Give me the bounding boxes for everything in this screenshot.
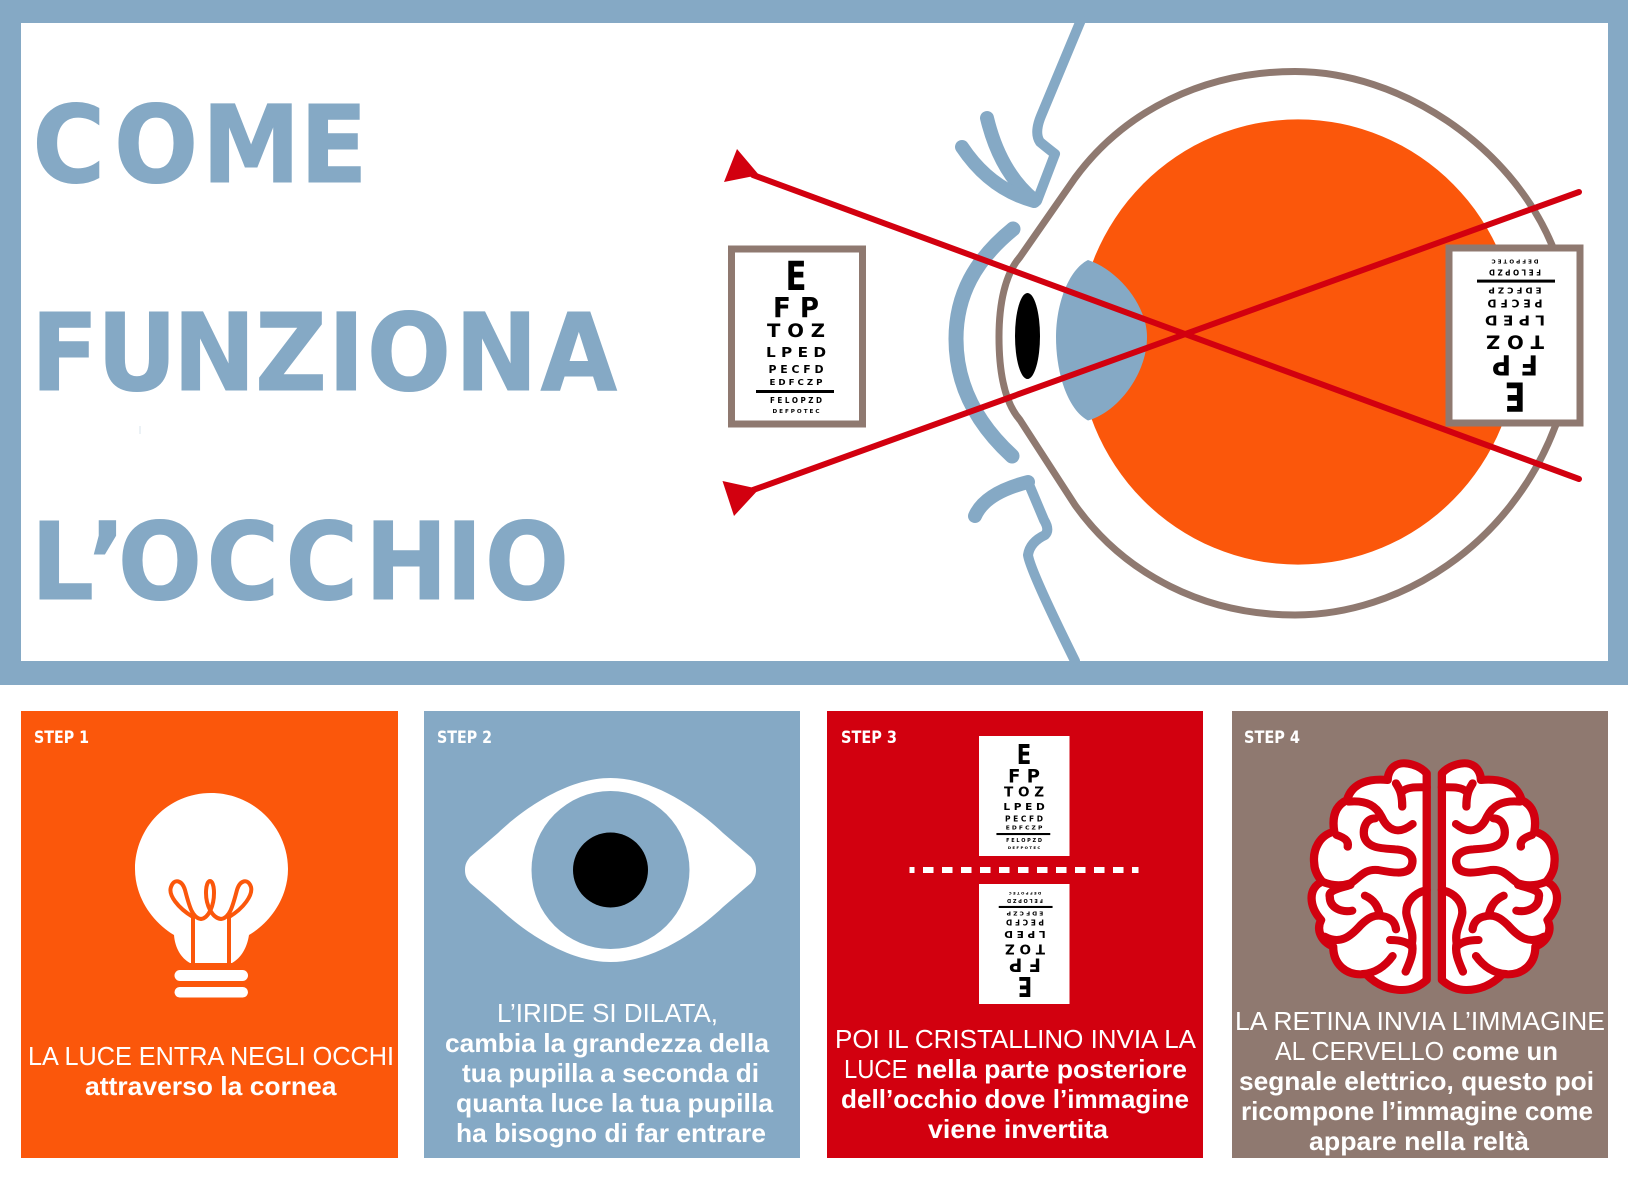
eye chart: left: E — [786, 254, 806, 300]
eye chart: inverted on retina: D E F P O T E C — [1492, 258, 1538, 264]
icon: inverted eye chart: F P — [1009, 953, 1041, 975]
frame: top panel border — [0, 0, 1628, 685]
step 3 label: STEP 3 — [841, 728, 897, 748]
step 4 text: LA RETINA INVIA L’IMMAGINE — [1235, 1006, 1605, 1036]
icon: brain — [1312, 763, 1557, 990]
step 1 text: attraverso la cornea — [85, 1071, 337, 1101]
eye diagram — [722, 20, 1580, 661]
icon: upright eye chart: E D F C Z P — [1006, 826, 1042, 832]
panel: step 2 — [424, 711, 800, 1158]
eye chart: inverted on retina: P E C F D — [1488, 297, 1542, 310]
panel: step 3 — [827, 711, 1203, 1158]
icon: upright eye chart: F E L O P Z D — [1006, 838, 1042, 844]
upper face profile and lashes — [962, 20, 1081, 201]
lower face profile — [975, 482, 1075, 661]
eyeball outline — [999, 72, 1570, 615]
title line: L'OCCHIO: L’OCCHIO — [31, 501, 569, 625]
step 2 text: cambia la grandezza della — [445, 1028, 770, 1058]
eye chart: left: F E L O P Z D — [770, 395, 822, 405]
icon: light bulb — [135, 793, 288, 998]
step 2 text: ha bisogno di far entrare — [456, 1118, 766, 1148]
eye chart: left: P E C F D — [768, 363, 824, 376]
icon: upright eye chart: E — [1017, 738, 1031, 771]
eyelid arc — [956, 229, 1013, 456]
eye chart: inverted on retina: E D F C Z P — [1488, 286, 1542, 296]
icon: upright eye chart: D E F P O T E C — [1008, 845, 1040, 850]
step 1 text: LA LUCE ENTRA NEGLI OCCHI — [28, 1041, 394, 1071]
eye chart: inverted on retina: E — [1504, 373, 1526, 419]
icon: inverted eye chart: F E L O P Z D — [1007, 897, 1043, 903]
step 4 text: segnale elettrico, questo poi — [1239, 1066, 1594, 1096]
eye chart: left — [732, 249, 862, 424]
pupil — [1015, 293, 1040, 379]
step 4 text: come un — [1452, 1036, 1558, 1066]
dashed mirror line — [910, 867, 1138, 873]
eye chart: inverted on retina — [1449, 248, 1580, 423]
step 2 text: tua pupilla a seconda di — [462, 1058, 759, 1088]
step 3 text — [835, 1024, 1197, 1144]
eye chart: inverted on retina: F P — [1492, 349, 1538, 380]
title line: COME: COME — [32, 84, 367, 208]
icon: upright eye chart — [979, 736, 1070, 856]
panel: step 1 — [21, 711, 398, 1158]
step 2 text: quanta luce la tua pupilla — [456, 1088, 774, 1118]
icon: inverted eye chart: T O Z — [1005, 941, 1045, 956]
step 3 text: POI IL CRISTALLINO INVIA LA — [835, 1024, 1197, 1054]
step 3 text: nella parte posteriore — [916, 1054, 1187, 1084]
step 1 text — [28, 1041, 394, 1101]
eye chart: inverted on retina: T O Z — [1486, 331, 1544, 353]
panel: step 4 — [1232, 711, 1608, 1158]
eye chart: inverted on retina: L P E D — [1485, 312, 1545, 328]
step 3 text: dell’occhio dove l’immagine — [841, 1084, 1189, 1114]
icon: inverted eye chart: E D F C Z P — [1007, 909, 1043, 915]
step 2 label: STEP 2 — [437, 728, 492, 748]
eye chart: left: T O Z — [767, 320, 825, 342]
step 3 text: viene invertita — [928, 1114, 1109, 1144]
step 4 label: STEP 4 — [1244, 728, 1300, 748]
eye chart: left: D E F P O T E C — [772, 409, 820, 415]
lens — [1056, 260, 1147, 420]
icon: upright eye chart: T O Z — [1004, 785, 1044, 800]
eye chart: inverted on retina: F E L O P Z D — [1489, 268, 1541, 278]
step 4 text: ricompone l’immagine come — [1241, 1096, 1593, 1126]
icon: eye — [465, 778, 756, 962]
arrow: upper light ray — [724, 149, 1579, 479]
icon: inverted eye chart: L P E D — [1004, 928, 1046, 939]
icon: upright eye chart: F P — [1008, 766, 1040, 788]
brain right hemisphere — [1442, 763, 1557, 990]
step 4 text: AL CERVELLO — [1275, 1036, 1444, 1066]
arrow: lower light ray — [722, 192, 1579, 516]
step 3 text: LUCE — [844, 1054, 908, 1084]
title line: FUNZIONA: FUNZIONA — [31, 292, 617, 416]
eye chart: left: E D F C Z P — [770, 377, 822, 387]
step 1 label: STEP 1 — [34, 728, 89, 748]
icon: upright eye chart: P E C F D — [1005, 814, 1043, 823]
icon: inverted eye chart: D E F P O T E C — [1009, 891, 1041, 896]
eye chart: left: L P E D — [766, 345, 826, 361]
icon: upright eye chart: L P E D — [1003, 802, 1045, 813]
step 2 text — [445, 998, 774, 1148]
icon: inverted eye chart: E — [1018, 970, 1032, 1003]
step 2 text: L’IRIDE SI DILATA, — [497, 998, 718, 1028]
brain left hemisphere — [1312, 763, 1427, 990]
eye chart: left: F P — [773, 293, 819, 324]
orange eyeball interior — [1078, 119, 1518, 565]
step 4 text: appare nella reltà — [1309, 1126, 1530, 1156]
icon: inverted eye chart — [979, 884, 1070, 1004]
icon: inverted eye chart: P E C F D — [1006, 918, 1044, 927]
step 4 text — [1235, 1006, 1605, 1156]
title — [31, 84, 617, 625]
